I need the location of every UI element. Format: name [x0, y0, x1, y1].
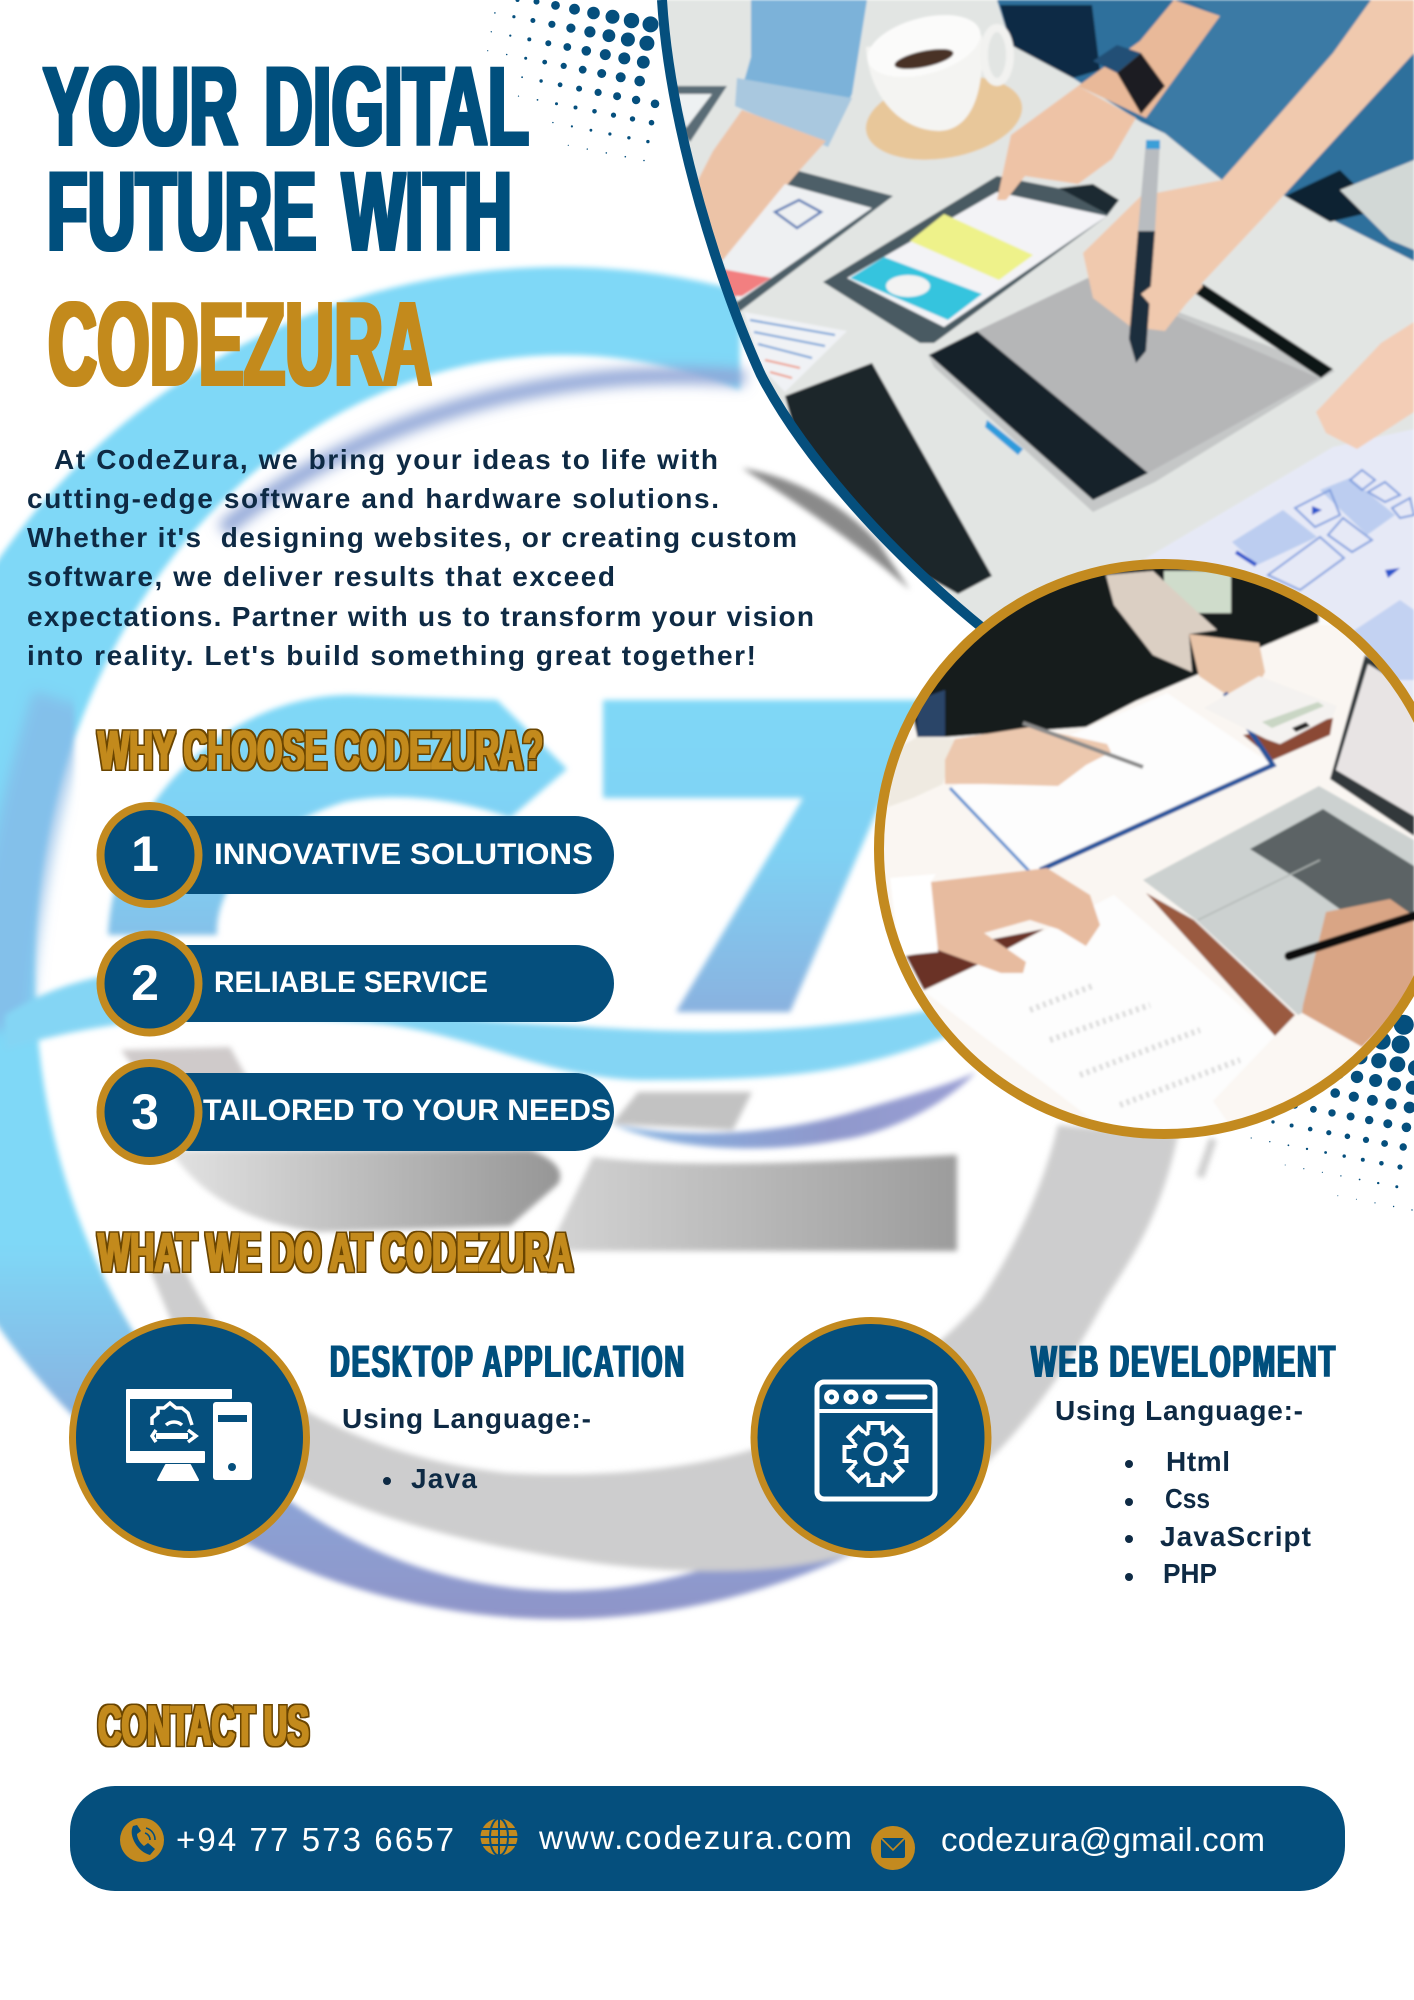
logo: gray C lower	[170, 1150, 560, 1232]
reason 3: 3	[131, 1084, 159, 1140]
photo: striped paper	[744, 312, 847, 392]
inset: right sleeve	[1215, 1038, 1350, 1120]
logo: periwinkle swoosh	[612, 1072, 976, 1148]
reason 3: TAILORED TO YOUR NEEDS	[203, 1094, 611, 1127]
photo: middle hand with watch	[1078, 0, 1220, 118]
logo: blue swoosh	[5, 970, 950, 1080]
reason 1: INNOVATIVE SOLUTIONS	[214, 838, 593, 871]
inset: lower left hand	[931, 868, 1100, 973]
inset: clipboard	[950, 693, 1273, 872]
inset: left sleeve and hand	[888, 737, 955, 807]
logo: periwinkle inner edge	[223, 375, 745, 530]
service icon: desktop application	[72, 1320, 306, 1554]
computer tower	[213, 1402, 252, 1480]
service: desktop application text: Java	[411, 1463, 477, 1494]
heading: contact us: CONTACT US	[98, 1694, 309, 1758]
service: web development text	[1031, 1336, 1337, 1589]
logo: gray Z bar	[548, 1155, 957, 1251]
service icon: web development	[754, 1320, 988, 1554]
icon: mail	[871, 1826, 915, 1870]
logo: gray thin stroke	[1200, 1139, 1213, 1177]
inset: calculator	[1224, 675, 1328, 746]
title	[43, 44, 529, 274]
phone number: +94 77 573 6657	[176, 1821, 454, 1858]
inset circle photo: business meeting	[870, 555, 1414, 1145]
service: desktop application text	[330, 1336, 686, 1494]
heading: why choose: WHY CHOOSE CODEZURA?	[98, 719, 543, 781]
service: desktop application text: Using Language:-	[342, 1403, 591, 1434]
service: web development text: Css	[1165, 1483, 1210, 1514]
intro paragraph: expectations. Partner with us to transform your vision	[27, 601, 814, 632]
intro paragraph: software, we deliver results that exceed	[27, 561, 615, 592]
photo: small corner card	[674, 86, 727, 142]
photo arc border	[662, 0, 985, 630]
monitor	[127, 1390, 231, 1480]
brand name: CODEZURA	[48, 278, 432, 411]
photo: clothing at the top	[997, 0, 1414, 261]
reason 2: 2	[131, 955, 159, 1011]
contact bar	[70, 1786, 1345, 1891]
inset: laptop	[1143, 786, 1414, 1015]
service: web development text: PHP	[1163, 1558, 1217, 1589]
reason 2	[100, 934, 614, 1032]
reason 3	[100, 1063, 614, 1161]
inset: hand on calculator	[1189, 634, 1265, 697]
halftone dots: top	[487, 0, 659, 161]
photo: smartphone	[785, 363, 992, 594]
logo: blue letter Z	[603, 700, 925, 1012]
photo: table	[667, 0, 1414, 622]
logo: blue letter C	[108, 695, 567, 935]
service: desktop application text: DESKTOP APPLICATION	[330, 1336, 686, 1387]
service: web development text: JavaScript	[1160, 1521, 1311, 1552]
inset: dark table strip	[906, 929, 1044, 990]
photo: stylus pen	[1138, 141, 1160, 231]
photo: lower right hand	[1316, 322, 1414, 449]
inset: wood under laptop	[1146, 893, 1295, 1036]
photo: left denim sleeve	[744, 0, 868, 99]
inset: wood strip	[1243, 718, 1333, 760]
inset: large paper	[928, 896, 1273, 1129]
intro paragraph	[27, 444, 814, 671]
title: FUTURE WITH	[47, 149, 512, 274]
photo: mockup board	[823, 176, 1119, 343]
logo: gray Z diagonal	[612, 1092, 752, 1130]
inset: lower left cuff	[890, 874, 938, 956]
inset: dark background and suit	[914, 569, 1320, 738]
photo: wireframe paper	[1143, 429, 1414, 720]
service: web development text: Html	[1166, 1446, 1230, 1477]
reason 2: RELIABLE SERVICE	[214, 966, 488, 999]
background logo watermark	[0, 267, 1213, 1619]
email: codezura@gmail.com	[941, 1821, 1265, 1858]
photo: clipboard	[722, 171, 893, 312]
icon: globe	[480, 1818, 518, 1856]
halftone dots: bottom right	[1251, 1015, 1414, 1211]
photo: coffee cup	[864, 76, 1024, 161]
intro paragraph: into reality. Let's build something great together!	[27, 640, 756, 671]
logo: gray ring	[150, 1125, 1178, 1571]
logo: outer swirl ring	[0, 267, 880, 1619]
inset: right hand	[1302, 899, 1414, 1047]
photo: left forearm	[696, 110, 826, 261]
photo: tablet	[928, 312, 1334, 512]
logo: gray C stub	[121, 1047, 265, 1110]
photo: right arm and hand	[1083, 0, 1414, 331]
heading: what we do: WHAT WE DO AT CODEZURA	[98, 1221, 573, 1283]
intro paragraph: Whether it's designing websites, or creating custom	[27, 522, 797, 553]
photo: fingers over pen	[1139, 284, 1204, 304]
intro paragraph: cutting-edge software and hardware solutions.	[27, 483, 719, 514]
logo: gray crescent	[742, 468, 910, 590]
inset: desk	[884, 620, 1414, 1119]
reason 1: 1	[131, 826, 159, 882]
gear and wrench	[152, 1403, 196, 1442]
reason 1	[100, 806, 614, 904]
inset: gold ring	[879, 564, 1414, 1134]
top right photo: design team at table	[650, 0, 1414, 720]
inset: beige sleeve	[1106, 571, 1217, 672]
service: web development text: Using Language:-	[1055, 1395, 1303, 1426]
logo: left darker band	[0, 700, 62, 1030]
intro paragraph: At CodeZura, we bring your ideas to life with	[54, 444, 718, 475]
icon: phone	[120, 1818, 164, 1862]
title: YOUR DIGITAL	[43, 44, 529, 169]
website: www.codezura.com	[538, 1819, 852, 1856]
gear	[844, 1423, 906, 1485]
browser window	[817, 1382, 935, 1499]
